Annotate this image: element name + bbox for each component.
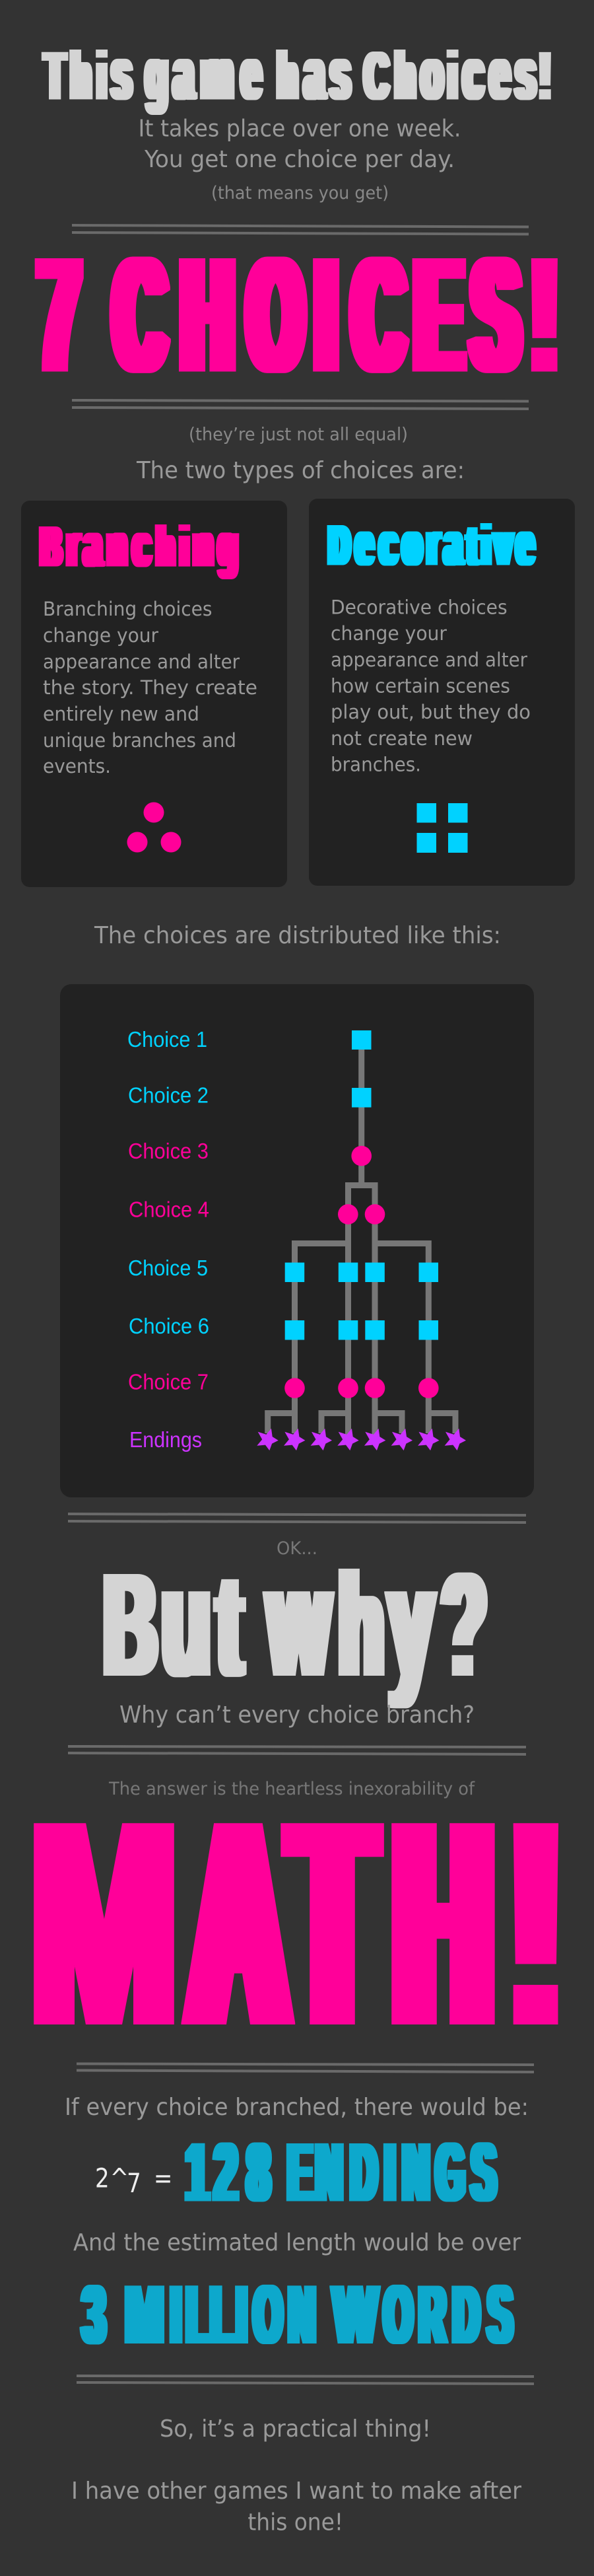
formula: 2^7 = [95, 2163, 172, 2199]
intro line 2: You get one choice per day. [144, 146, 455, 173]
panel body: branching: entirely new and [43, 703, 199, 725]
closing text 1: So, it’s a practical thing! [160, 2415, 431, 2443]
choice labels: Choice 6 [129, 1314, 209, 1338]
tree endings: stars [257, 1429, 466, 1450]
text: estimated length: And the estimated length would be over [73, 2229, 521, 2256]
small text: OK: OK... [277, 1538, 317, 1559]
panel body: decorative: change your [331, 622, 447, 645]
panel body: branching: the story. They create [43, 676, 257, 699]
choice labels [127, 1027, 209, 1452]
tree nodes: decorative squares [285, 1030, 438, 1340]
panel body: decorative: play out, but they do [331, 701, 531, 723]
icon: three pink circles [127, 802, 181, 852]
panel body: branching: Branching choices [43, 598, 213, 620]
choice labels: Choice 5 [128, 1256, 208, 1280]
section text: distribution: The choices are distributed like this: [94, 922, 501, 949]
title: This game has Choices! [45, 34, 550, 114]
panel body: branching [43, 598, 257, 777]
stat: 3 million words [82, 2268, 512, 2361]
choice labels: Endings [129, 1427, 202, 1452]
panel heading: branching: Branching [41, 510, 238, 579]
stat: 128 endings: 128 [186, 2126, 270, 2218]
stat: 3 million words: W [333, 2270, 377, 2361]
question text: Why can’t every choice branch? [119, 1701, 475, 1729]
small note: (that means you get) [211, 183, 389, 203]
small text: answer: The answer is the heartless inexorability of [108, 1779, 476, 1799]
choice labels: Choice 4 [129, 1198, 209, 1222]
intro line 1: It takes place over one week. [139, 116, 461, 143]
panel body: branching: events. [43, 755, 111, 777]
tree connectors [268, 1040, 455, 1437]
panel body: decorative: not create new [331, 727, 473, 750]
stat: 3 million words: 3 [82, 2268, 106, 2361]
panel body: decorative: branches. [331, 753, 421, 775]
panel body: branching: unique branches and [43, 729, 236, 752]
choice labels: Choice 1 [127, 1027, 207, 1052]
panel body: branching: appearance and alter [43, 651, 240, 673]
big headline: math: ATH! [191, 1762, 558, 2086]
closing text 2: I have other games I want to make after [71, 2478, 522, 2505]
panel body: decorative [331, 596, 531, 775]
panel body: decorative: appearance and alter [331, 649, 527, 671]
big headline: 7 choices: 7 CHOICES! [40, 225, 556, 404]
icon: four cyan squares [417, 803, 467, 853]
panel heading: decorative: Decorative [329, 509, 534, 578]
stat: 128 endings: ENDINGS [288, 2127, 496, 2218]
choice labels: Choice 2 [128, 1083, 209, 1107]
big headline: math: M [32, 1761, 176, 2085]
big headline: but why: But why? [104, 1533, 486, 1709]
choice labels: Choice 7 [128, 1370, 209, 1394]
small note: (they’re just not all equal) [189, 424, 408, 445]
choice labels: Choice 3 [128, 1139, 209, 1163]
stat: 3 million words: ILLION [171, 2270, 315, 2361]
panel: choice tree [60, 984, 534, 1497]
stat: 128 endings [186, 2126, 496, 2218]
panel: branching [21, 501, 287, 887]
panel body: decorative: how certain scenes [331, 675, 510, 698]
closing text 2 [71, 2478, 522, 2536]
stat: 3 million words: ORDS [384, 2270, 512, 2361]
closing text 2: this one! [248, 2509, 343, 2536]
section text: two types: The two types of choices are: [136, 457, 465, 484]
tree nodes: branching circles [284, 1146, 439, 1398]
big headline: math [32, 1761, 558, 2086]
stat: 3 million words: M [125, 2270, 164, 2361]
panel body: branching: change your [43, 624, 158, 647]
panel: decorative [309, 499, 575, 886]
text: if every choice branched: If every choice branched, there would be: [65, 2094, 529, 2121]
panel body: decorative: Decorative choices [331, 596, 508, 618]
